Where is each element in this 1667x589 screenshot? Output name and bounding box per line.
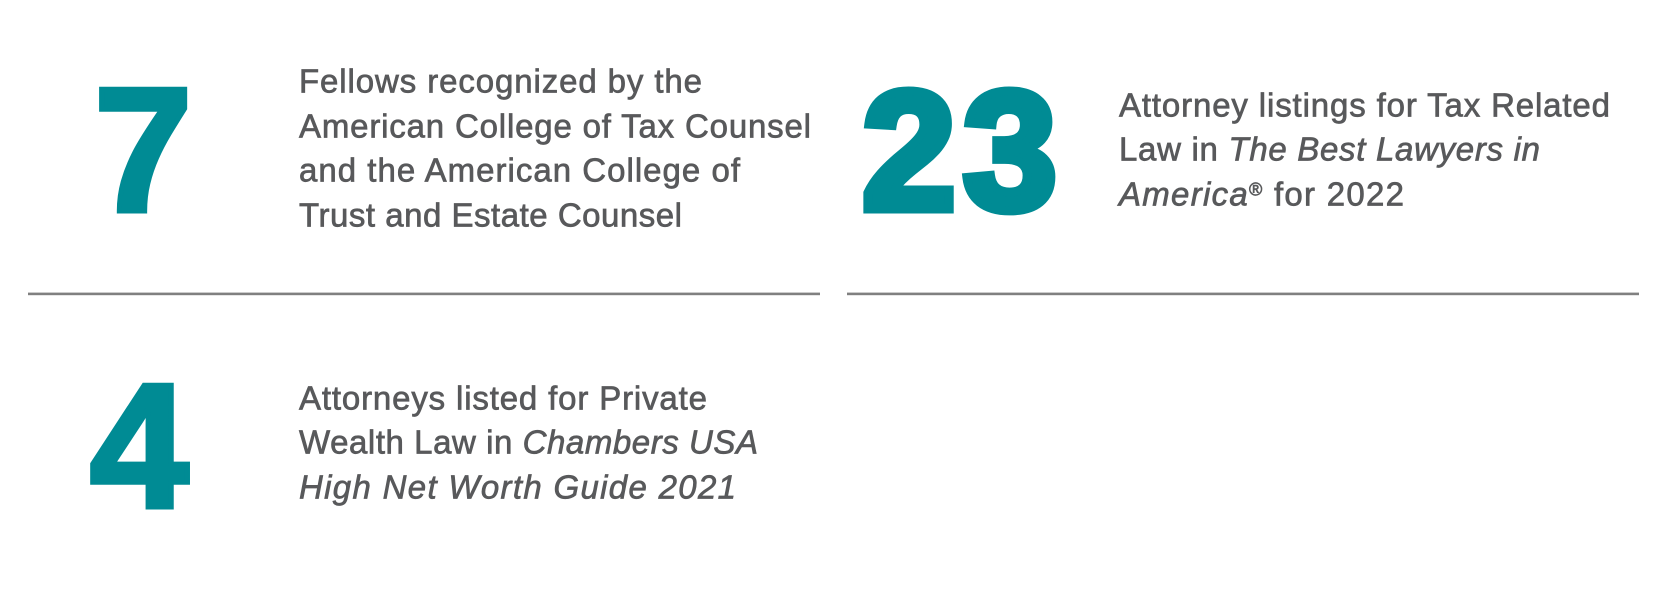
panel: attorney listings: [862, 56, 1610, 245]
number 23: 23: [862, 56, 1064, 245]
text: fellows description: Fellows recognized by the: [299, 62, 702, 100]
panel: private wealth: [90, 347, 758, 545]
text: fellows description: and the American College of: [299, 152, 741, 188]
text: attorney listings description: America: [1117, 176, 1248, 212]
divider: right: [847, 293, 1639, 295]
text: private wealth description: High Net Worth Guide 2021: [299, 468, 736, 506]
text: attorney listings description: Attorney listings for Tax Related: [1119, 86, 1610, 124]
text: private wealth description: [299, 380, 758, 506]
text: fellows description: [299, 62, 811, 234]
text: private wealth description: Attorneys listed for Private: [299, 380, 707, 416]
text: fellows description: American College of Tax Counsel: [299, 108, 811, 144]
panel: fellows: [94, 51, 811, 249]
text: attorney listings description: Law in The Best Lawyers in: [1119, 130, 1540, 168]
text: attorney listings description: ®: [1249, 180, 1262, 200]
text: fellows description: Trust and Estate Counsel: [299, 196, 682, 234]
text: private wealth description: Wealth Law in Chambers USA: [299, 424, 758, 460]
divider: left: [28, 293, 820, 295]
text: attorney listings description: for 2022: [1264, 176, 1404, 212]
text: attorney listings description: [1117, 86, 1610, 212]
number 4: 4: [90, 347, 188, 545]
number 7: 7: [94, 51, 192, 249]
